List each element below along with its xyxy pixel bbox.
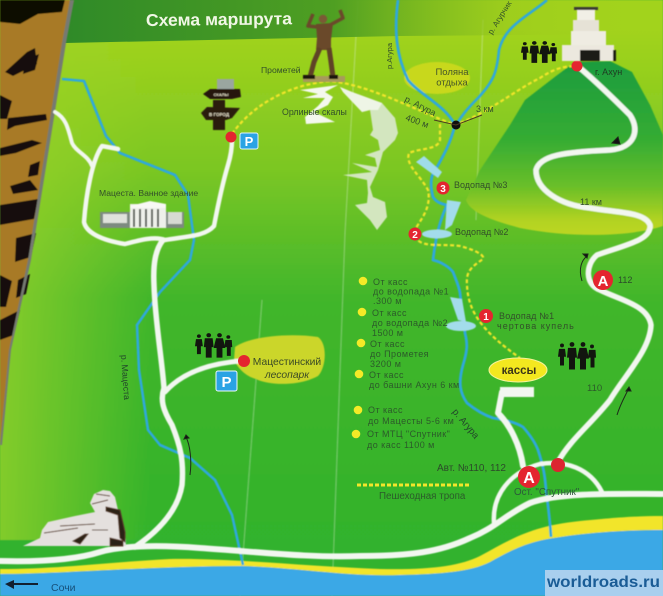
sphinx sculpture bbox=[23, 490, 126, 546]
bus marker Sputnik: А bbox=[523, 470, 535, 487]
bus marker Sputnik bbox=[518, 466, 540, 488]
legend item 3: От касс bbox=[370, 339, 405, 349]
hill of Akhun bbox=[466, 61, 663, 235]
label: glade: отдыха bbox=[436, 78, 468, 88]
label: forest park: Мацестинский bbox=[253, 357, 321, 368]
arrow: road Matsesta bbox=[186, 437, 191, 475]
ticket office bbox=[489, 358, 547, 382]
waterfall 2 bbox=[422, 200, 461, 238]
legend item 2: 1500 м bbox=[372, 328, 403, 338]
bath building picture bbox=[100, 201, 184, 228]
parking sign forest: P bbox=[221, 374, 232, 391]
river Agura bbox=[396, 0, 551, 537]
direction arrows bbox=[184, 137, 631, 475]
river Agurchik bbox=[456, 0, 547, 125]
signpost icon: В ГОРОД bbox=[209, 112, 230, 117]
forest park blob bbox=[234, 335, 325, 384]
glade blob bbox=[404, 62, 470, 94]
legend item 1: От касс bbox=[373, 277, 408, 287]
marker 1: 1 bbox=[483, 312, 489, 323]
stop dot: Akhun bbox=[572, 60, 582, 72]
legend item 6: до касс 1100 м bbox=[367, 440, 435, 450]
header band bbox=[65, 0, 663, 43]
label: waterfall 2: Водопад №2 bbox=[455, 227, 508, 237]
label Sochi: Сочи bbox=[51, 582, 76, 594]
legend of distances bbox=[352, 277, 460, 450]
legend item 5: до Мацесты 5-6 км bbox=[368, 416, 454, 426]
label: waterfall 1: Водопад №1 bbox=[499, 311, 554, 321]
signpost icon bbox=[201, 79, 241, 130]
label: Sputnik stop: Ост. "Спутник" bbox=[514, 487, 580, 498]
legend: walking trail sample bbox=[357, 484, 469, 486]
legend item 3: до Прометея bbox=[370, 349, 429, 359]
legend item 4: до башни Ахун 6 км bbox=[369, 380, 460, 390]
arrow head 3 bbox=[184, 435, 189, 439]
label: Akhun: г. Ахун bbox=[595, 67, 622, 77]
legend item 2: От касс bbox=[372, 308, 407, 318]
label: Agura at junction: р. Агура bbox=[403, 94, 438, 118]
label: waterfall 3: Водопад №3 bbox=[454, 180, 507, 190]
label Prometheus: Прометей bbox=[261, 65, 301, 75]
arrow: road 110 bbox=[617, 390, 628, 415]
river Matsesta bbox=[62, 79, 243, 565]
legend item 5 bbox=[354, 405, 454, 426]
legend item 2 bbox=[358, 308, 448, 338]
label 110: 110 bbox=[587, 383, 602, 394]
label: Agura vertical: р.Агура bbox=[385, 42, 394, 69]
bus marker 112 bbox=[593, 270, 613, 290]
arrow head 2 bbox=[626, 387, 631, 391]
torn board edge on the left bbox=[0, 0, 74, 445]
waterfall 1 bbox=[446, 297, 476, 331]
label: 3 km: 3 км bbox=[476, 104, 494, 114]
junction point bbox=[452, 120, 460, 130]
signpost icon: СКАЛЫ bbox=[214, 92, 229, 97]
legend item 2: до водопада №2 bbox=[372, 318, 448, 328]
marker 2: 2 bbox=[412, 230, 418, 241]
arrow head 4 bbox=[612, 137, 620, 144]
parking sign top bbox=[240, 133, 258, 149]
label: 11 km: 11 км bbox=[580, 197, 602, 207]
label: bus numbers: Авт. №110, 112 bbox=[437, 463, 506, 474]
ticket office road end bbox=[500, 387, 534, 397]
label 112: 112 bbox=[618, 275, 632, 285]
waterfall 3 bbox=[416, 156, 442, 178]
parking sign forest bbox=[216, 371, 237, 391]
ticket office: кассы bbox=[502, 365, 537, 377]
legend item 3: 3200 м bbox=[370, 359, 401, 369]
sea bbox=[0, 530, 663, 596]
marker 1 bbox=[479, 309, 493, 323]
legend item 1 bbox=[359, 277, 449, 306]
watermark: worldroads.ru bbox=[546, 574, 660, 591]
Eagle Rocks cliff bbox=[300, 85, 398, 230]
legend item 1: .300 м bbox=[373, 296, 402, 306]
marker 3: 3 bbox=[440, 184, 446, 195]
legend item 6: От МТЦ "Спутник" bbox=[367, 429, 450, 439]
title: Схема маршрута bbox=[146, 9, 293, 30]
marker 2 bbox=[408, 228, 422, 241]
walking trail bbox=[232, 66, 577, 358]
watermark bbox=[545, 570, 663, 596]
label: forest park: лесопарк bbox=[264, 370, 310, 381]
label: waterfall 1: чертова купель bbox=[497, 321, 575, 331]
label: glade: Поляна bbox=[435, 67, 469, 78]
marker 3 bbox=[436, 182, 450, 195]
legend item 3 bbox=[357, 339, 429, 369]
distance arrows bbox=[434, 115, 482, 125]
arrow to Sochi bbox=[5, 580, 38, 589]
label: river Matsesta: р. Мацеста bbox=[119, 354, 132, 400]
legend item 4: От касс bbox=[369, 370, 404, 380]
family icon at Akhun bbox=[521, 41, 557, 63]
family icon forest park bbox=[195, 333, 232, 358]
legend item 5: От касс bbox=[368, 405, 403, 415]
legend item 1: до водопада №1 bbox=[373, 286, 449, 296]
label Eagle Rocks: Орлиные скалы bbox=[282, 107, 347, 117]
label: 400 m: 400 м bbox=[404, 112, 430, 130]
parking sign top: P bbox=[245, 134, 254, 149]
stop dot: Prometheus parking bbox=[226, 132, 236, 142]
legend item 6 bbox=[352, 429, 450, 450]
label: bath building: Мацеста. Ванное здание bbox=[99, 188, 198, 198]
legend item 4 bbox=[355, 370, 460, 390]
label: Agurchik: р. Агурчик bbox=[486, 0, 514, 36]
Prometheus statue bbox=[303, 10, 345, 82]
tower of Akhun bbox=[562, 7, 616, 61]
stop dot: Sputnik bbox=[551, 458, 565, 472]
beach strip bbox=[0, 516, 663, 575]
bus marker 112: А bbox=[598, 273, 609, 290]
arrow: road 112 bbox=[580, 256, 587, 281]
label: river Agura lower: р. Агура bbox=[450, 407, 481, 442]
stop dot: forest park bbox=[238, 355, 250, 367]
label: walking trail: Пешеходная тропа bbox=[379, 491, 466, 502]
arrow head 1 bbox=[583, 254, 588, 258]
family icon near ticket office bbox=[558, 342, 596, 369]
